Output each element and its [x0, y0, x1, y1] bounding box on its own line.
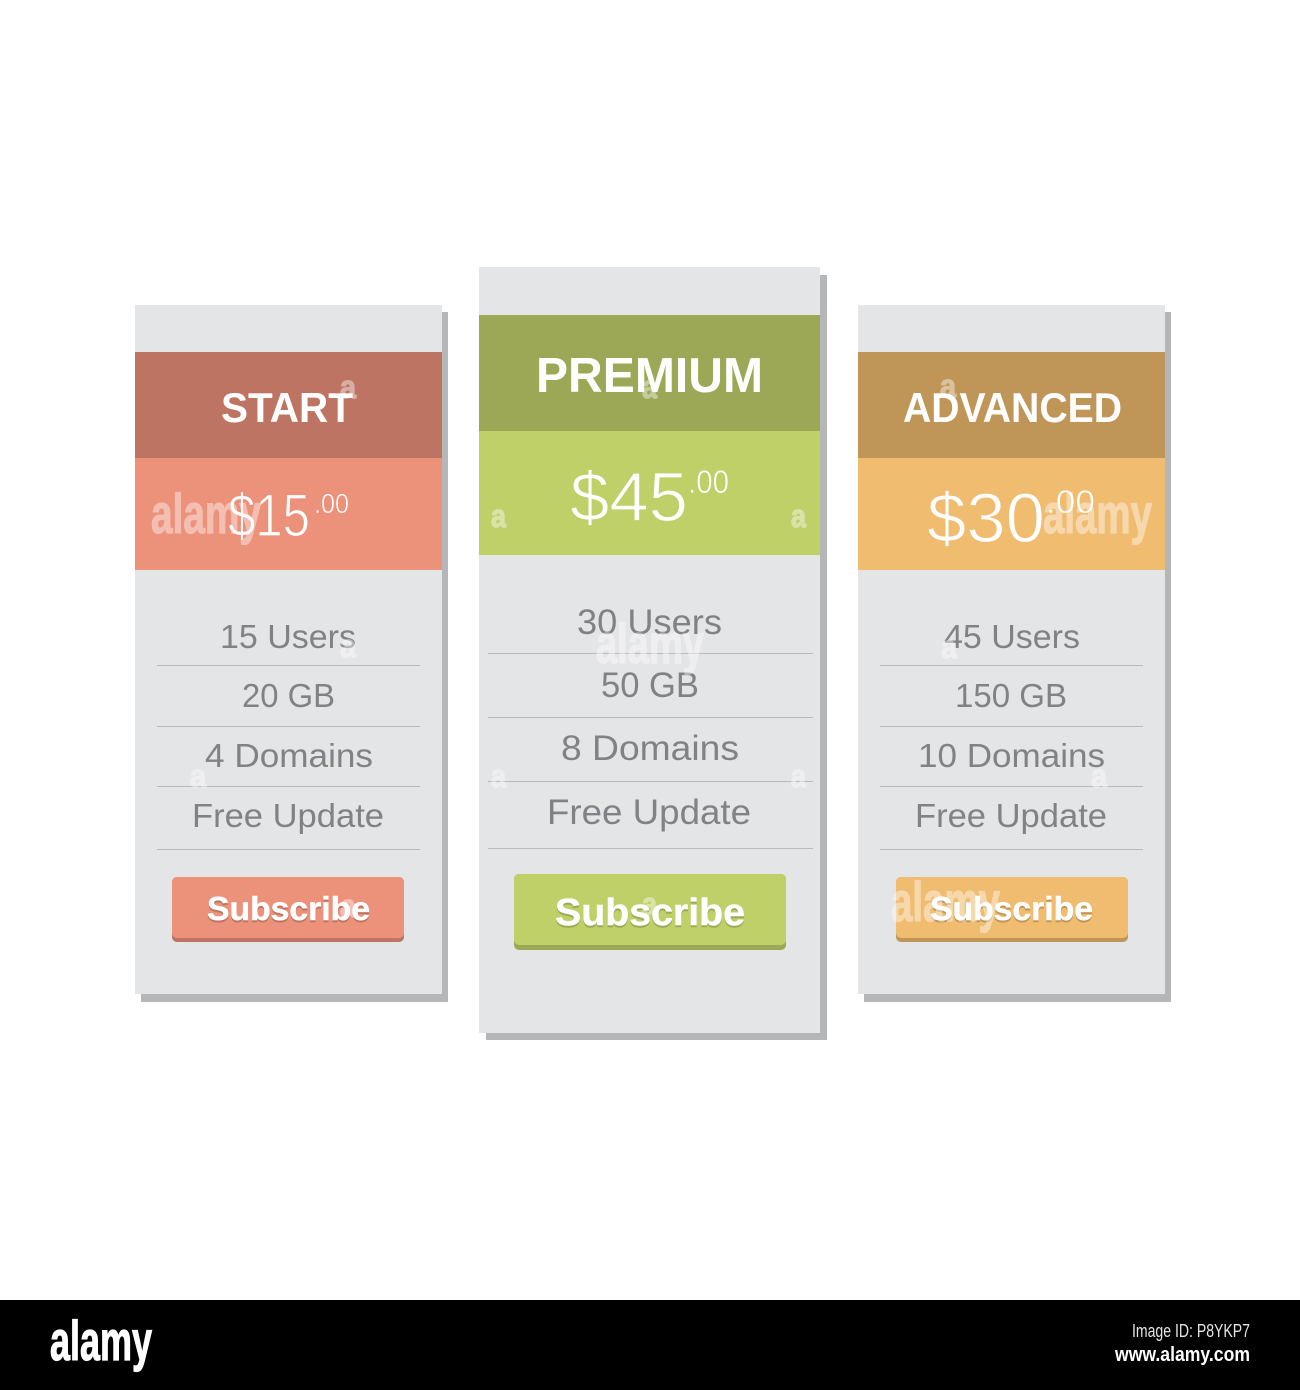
plan header: START: START — [221, 384, 353, 431]
stock watermarks: a — [340, 888, 356, 924]
stock watermarks — [151, 368, 1152, 933]
card shadow — [141, 312, 448, 1002]
stock watermarks: a — [1091, 758, 1107, 794]
subscribe button: Subscribe — [930, 892, 1093, 929]
plan header: ADVANCED: ADVANCED — [903, 384, 1122, 431]
plan header: ADVANCED — [858, 352, 1165, 458]
subscribe button: Subscribe — [930, 890, 1093, 927]
feature list: 45 Users — [944, 618, 1080, 655]
price: $45.00: $45 — [570, 458, 688, 536]
price: $15.00: .00 — [314, 488, 349, 519]
feature list: 50 GB — [601, 666, 699, 705]
feature list: Free Update — [547, 793, 751, 832]
feature list — [880, 618, 1143, 850]
subscribe button — [172, 877, 404, 942]
feature list: 10 Domains — [918, 737, 1105, 774]
panel: premium plan — [479, 267, 827, 1040]
subscribe button — [896, 877, 1128, 942]
feature list: 150 GB — [955, 677, 1067, 714]
footer logo: alamy — [50, 1309, 152, 1372]
stock watermarks: a — [791, 758, 806, 794]
card body — [858, 305, 1165, 994]
card shadow — [486, 275, 827, 1040]
card shadow — [864, 312, 1171, 1002]
stock watermarks: a — [642, 369, 657, 405]
price: $15.00 — [135, 458, 442, 570]
stock watermarks: a — [340, 369, 356, 405]
plan header: START — [135, 352, 442, 458]
price: $30.00 — [858, 458, 1165, 570]
panel: start plan — [135, 305, 448, 1002]
card body — [135, 305, 442, 994]
feature list: 20 GB — [242, 677, 335, 714]
subscribe button: Subscribe — [555, 894, 745, 936]
subscribe button: Subscribe — [207, 892, 370, 929]
price: $30.00: $30 — [927, 479, 1045, 557]
subscribe button — [514, 874, 786, 950]
feature list: Free Update — [915, 797, 1107, 834]
footer url: www.alamy.com — [1114, 1344, 1250, 1366]
stock watermarks: a — [940, 368, 956, 404]
price: $45.00 — [479, 431, 820, 555]
price: $15.00: $15 — [228, 482, 310, 549]
feature list: 4 Domains — [205, 737, 373, 774]
feature list: 15 Users — [220, 618, 356, 655]
stock watermarks: a — [491, 498, 506, 534]
feature list: 8 Domains — [561, 729, 739, 768]
stock watermarks: a — [642, 886, 657, 922]
panel: advanced plan — [858, 305, 1171, 1002]
plan header: PREMIUM: PREMIUM — [536, 349, 763, 403]
subscribe button: Subscribe — [207, 890, 370, 927]
card body — [479, 267, 820, 1033]
stock watermarks: alamy — [891, 870, 1000, 933]
stock watermarks: a — [491, 758, 506, 794]
stock watermarks: a — [791, 498, 806, 534]
feature list: Free Update — [192, 797, 384, 834]
stock watermarks: a — [190, 758, 206, 794]
stock watermarks: alamy — [151, 482, 261, 545]
plan header: PREMIUM — [479, 315, 820, 431]
feature list — [488, 603, 813, 849]
stock watermarks: a — [941, 629, 957, 665]
stock watermarks: alamy — [1043, 482, 1152, 545]
stock watermarks: alamy — [596, 612, 704, 675]
subscribe button: Subscribe — [555, 892, 745, 934]
feature list — [157, 618, 420, 850]
price: $45.00: .00 — [688, 464, 729, 500]
price: $30.00: .00 — [1046, 484, 1095, 520]
feature list: 30 Users — [577, 603, 722, 642]
footer bar — [0, 1300, 1300, 1390]
stock watermarks: a — [340, 628, 356, 664]
image id: Image ID: P8YKP7 — [1132, 1321, 1250, 1341]
